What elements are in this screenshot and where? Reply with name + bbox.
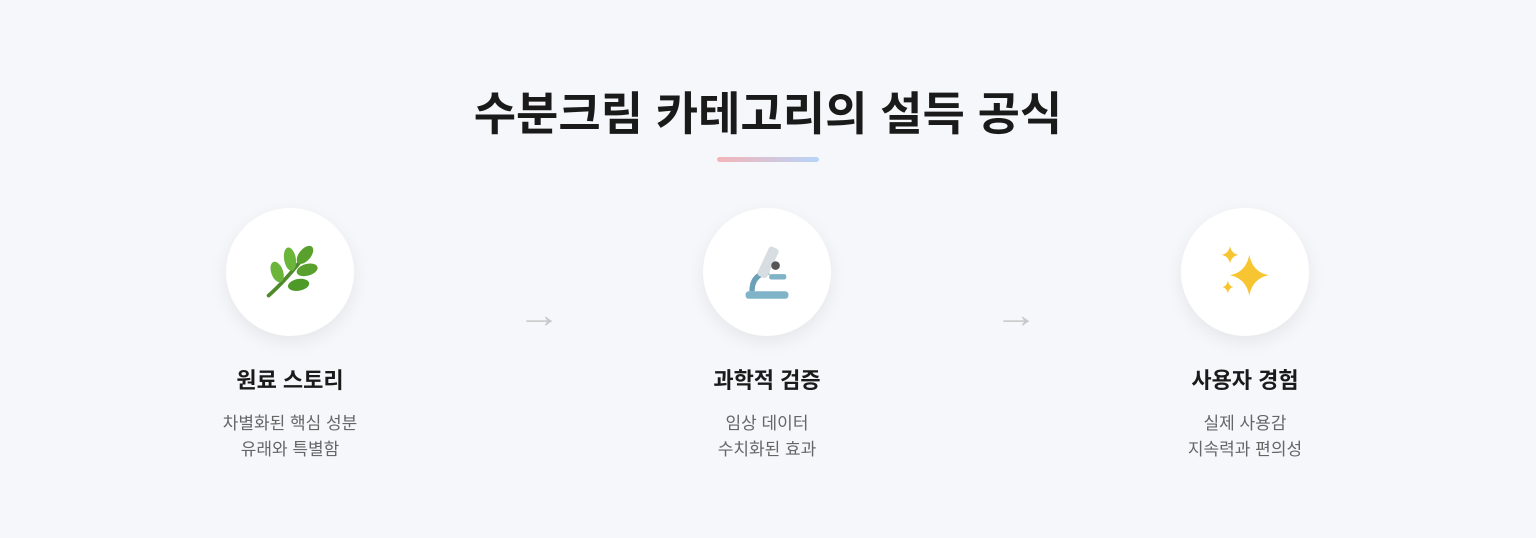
icon: sparkles	[1181, 208, 1309, 336]
step title: 과학적 검증	[713, 368, 821, 393]
step description: 유래와 특별함	[241, 440, 339, 459]
step description: 실제 사용감	[1204, 414, 1286, 433]
title: 수분크림 카테고리의 설득 공식	[474, 88, 1062, 140]
icon: microscope	[703, 208, 831, 336]
title underline	[717, 157, 819, 162]
arrow: →	[994, 294, 1038, 335]
step description: 임상 데이터	[726, 414, 808, 433]
step: 사용자 경험	[1181, 208, 1309, 459]
step description	[1188, 414, 1302, 459]
step description	[718, 414, 816, 459]
step description: 차별화된 핵심 성분	[223, 414, 357, 433]
step title: 원료 스토리	[236, 368, 344, 393]
step description	[223, 414, 357, 459]
step: 과학적 검증	[703, 208, 831, 459]
step: 원료 스토리	[223, 208, 357, 459]
step title: 사용자 경험	[1191, 368, 1299, 393]
step description: 수치화된 효과	[718, 440, 816, 459]
arrow: →	[517, 294, 561, 335]
icon: leaf	[226, 208, 354, 336]
step description: 지속력과 편의성	[1188, 440, 1302, 459]
